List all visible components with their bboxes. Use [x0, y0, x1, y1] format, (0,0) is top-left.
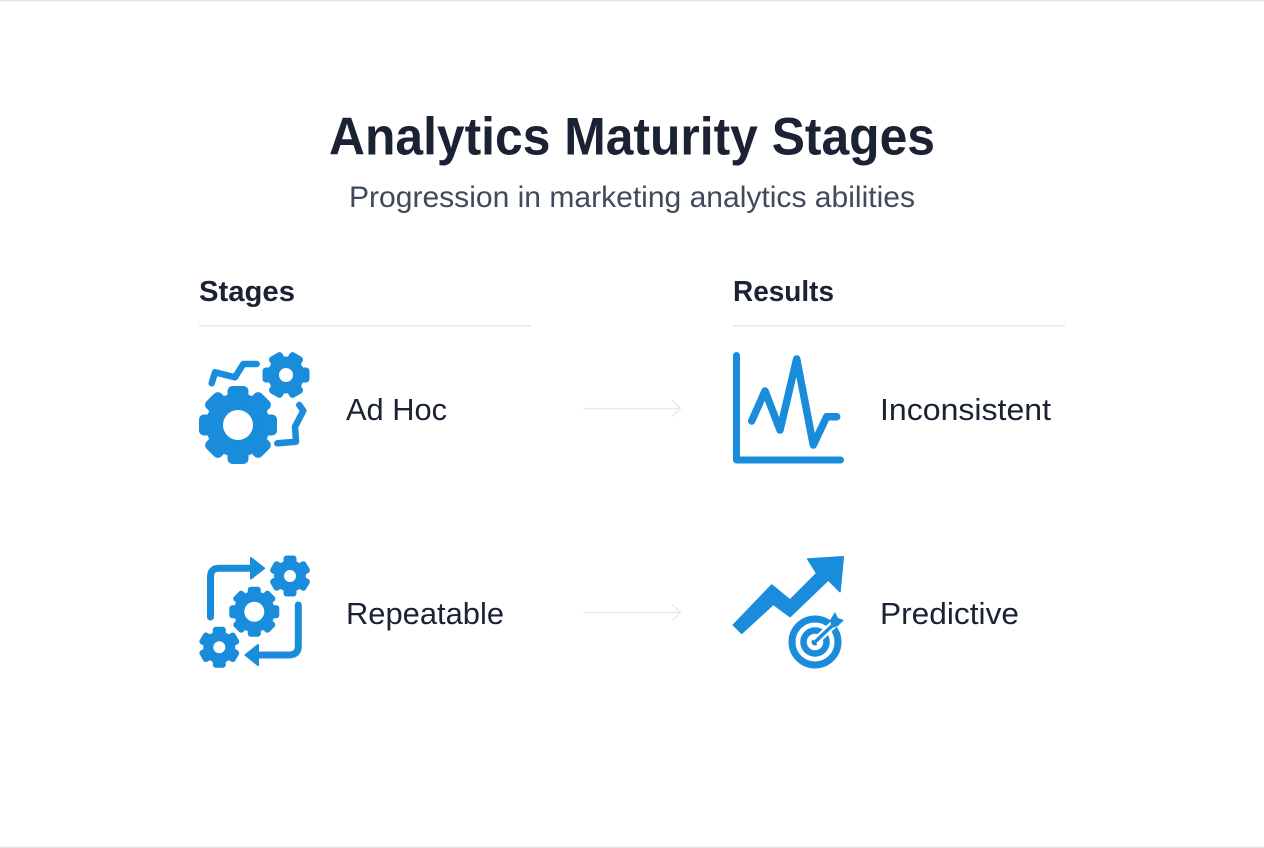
heading: stages: Stages [199, 276, 295, 308]
arrow: repeatable to predictive [583, 604, 680, 620]
subtitle: Progression in marketing analytics abilities [349, 181, 915, 214]
arrow: ad hoc to inconsistent [583, 400, 680, 416]
heading: results: Results [733, 276, 834, 308]
icon: inconsistent line chart [736, 356, 840, 460]
title: Analytics Maturity Stages [329, 108, 935, 166]
label: inconsistent: Inconsistent [880, 392, 1051, 427]
icon: repeatable gears [198, 556, 311, 668]
label: repeatable: Repeatable [346, 596, 504, 631]
icon: predictive arrow and target [733, 557, 844, 665]
icon: ad hoc gears [199, 351, 310, 464]
label: predictive: Predictive [880, 596, 1019, 631]
label: ad hoc: Ad Hoc [346, 392, 447, 427]
